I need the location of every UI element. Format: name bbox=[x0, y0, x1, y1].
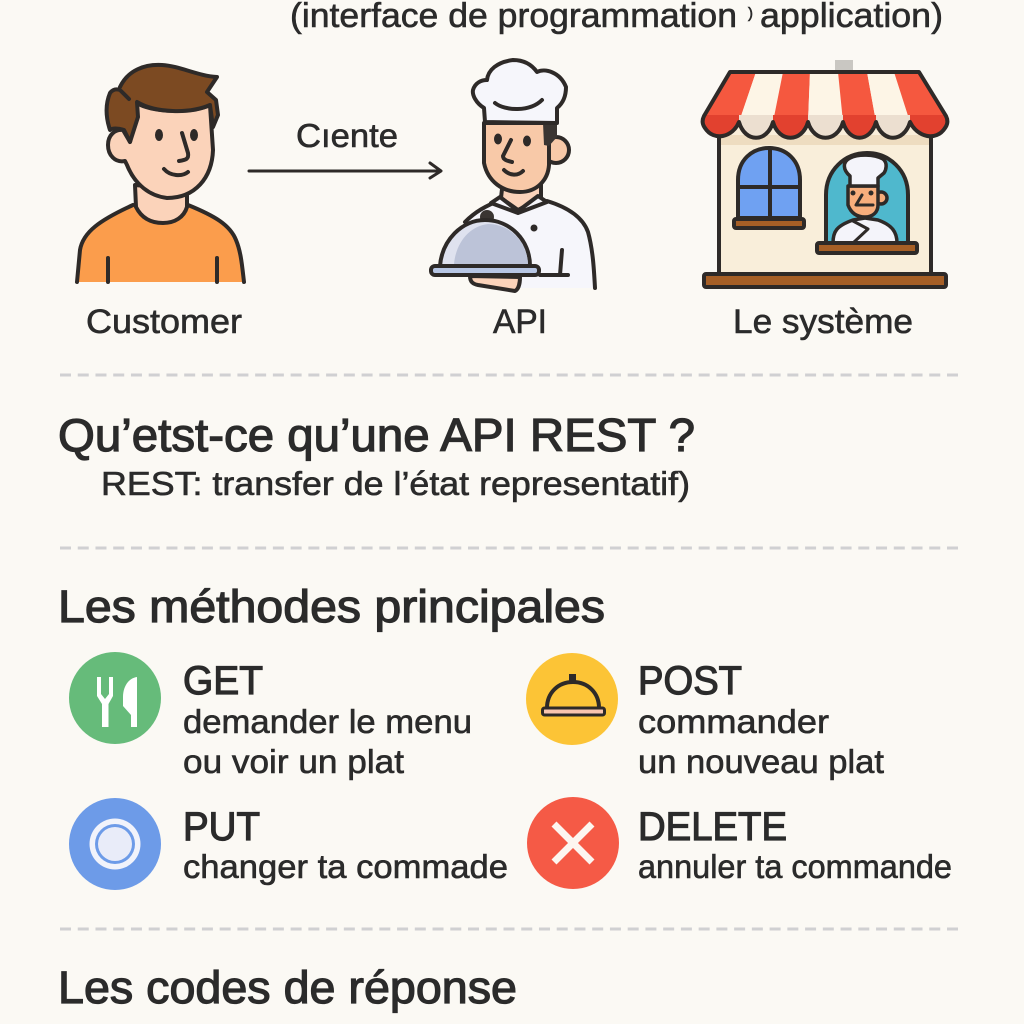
subtitle: interface de programmation: ) bbox=[748, 5, 753, 22]
method: PUT bbox=[69, 798, 508, 890]
arrow label: Cıente bbox=[296, 117, 398, 154]
label: API: API bbox=[493, 303, 547, 341]
subtitle: interface de programmation bbox=[290, 0, 943, 35]
method: GET bbox=[69, 652, 472, 780]
method: GET: ou voir un plat bbox=[183, 743, 404, 780]
label: Le système: Le système bbox=[733, 303, 913, 341]
method: POST: commander bbox=[638, 703, 829, 740]
label: Customer: Customer bbox=[86, 303, 242, 341]
text: REST definition: REST: transfer de l’état representatif) bbox=[101, 465, 690, 502]
heading: methods: Les méthodes principales bbox=[58, 581, 605, 632]
heading: REST question: Qu’etst-ce qu’une API REST ? bbox=[58, 409, 695, 461]
arrow: customer to API bbox=[249, 163, 441, 178]
icon: customer bbox=[77, 65, 244, 282]
method: GET: GET bbox=[183, 659, 263, 703]
heading: response codes: Les codes de réponse bbox=[58, 962, 517, 1013]
method: PUT: changer ta commade bbox=[183, 848, 508, 885]
method: POST: POST bbox=[638, 659, 742, 703]
method: POST: un nouveau plat bbox=[638, 743, 884, 780]
method: DELETE: annuler ta commande bbox=[638, 848, 952, 885]
method: DELETE: DELETE bbox=[638, 805, 787, 849]
method: PUT: PUT bbox=[183, 805, 260, 849]
icon: restaurant bbox=[703, 60, 947, 287]
method: POST bbox=[526, 653, 884, 780]
method: DELETE bbox=[527, 797, 952, 889]
icon: chef API bbox=[431, 60, 595, 291]
method: GET: demander le menu bbox=[183, 703, 472, 740]
